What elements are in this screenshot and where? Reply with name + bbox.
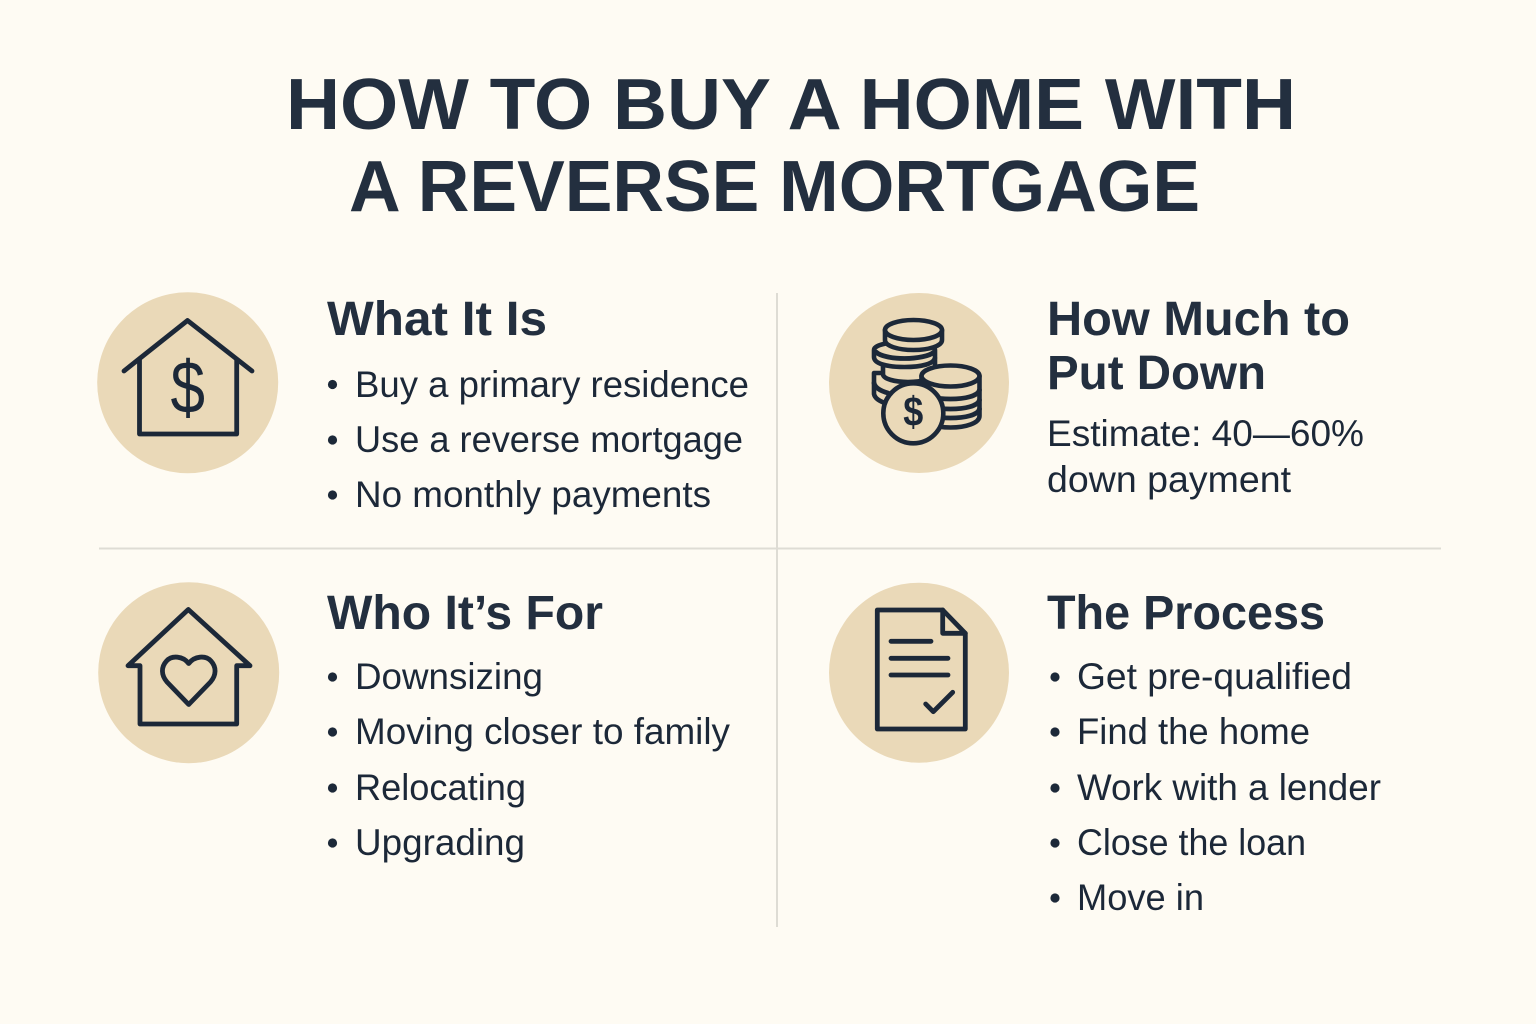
icon: document with check mark [829, 583, 1009, 763]
icon: coin stacks: $ [903, 390, 924, 436]
list: who it's for: Upgrading [355, 822, 525, 863]
list: the process: Work with a lender [1077, 767, 1381, 808]
list: the process: Close the loan [1077, 822, 1306, 863]
icon: house with dollar sign [97, 292, 278, 473]
heading: the process: The Process [1047, 587, 1325, 640]
panel: what it is [97, 292, 749, 515]
list: who it's for: Downsizing [355, 656, 543, 697]
list: the process: Find the home [1077, 711, 1310, 752]
list: what it is: Buy a primary residence [355, 364, 749, 405]
list: the process: Move in [1077, 877, 1204, 918]
list: what it is: Use a reverse mortgage [355, 419, 743, 460]
heading: how much to put down [1047, 293, 1350, 400]
icon: house with heart [98, 582, 279, 763]
text block: down payment estimate: down payment [1047, 459, 1292, 500]
title: HOW TO BUY A HOME WITH [286, 65, 1296, 145]
list: what it is [328, 364, 749, 515]
list: who it's for [328, 656, 730, 863]
list: the process [1050, 656, 1381, 918]
list: what it is: No monthly payments [355, 474, 711, 515]
list: who it's for: Relocating [355, 767, 526, 808]
title [286, 65, 1296, 227]
heading: what it is: What It Is [327, 293, 547, 346]
text block: down payment estimate: Estimate: 40—60% [1047, 413, 1364, 454]
panel: how much to put down [829, 293, 1364, 500]
title: A REVERSE MORTGAGE [349, 147, 1200, 227]
icon: coin stacks [829, 293, 1009, 473]
heading: who it's for: Who It’s For [327, 587, 603, 640]
icon: house with dollar sign: $ [170, 346, 205, 429]
heading: how much to put down: How Much to [1047, 293, 1350, 346]
panel: who it's for [98, 582, 730, 863]
list: who it's for: Moving closer to family [355, 711, 730, 752]
panel: the process [829, 583, 1381, 918]
list: the process: Get pre-qualified [1077, 656, 1352, 697]
text block: down payment estimate [1047, 413, 1364, 500]
heading: how much to put down: Put Down [1047, 347, 1266, 400]
